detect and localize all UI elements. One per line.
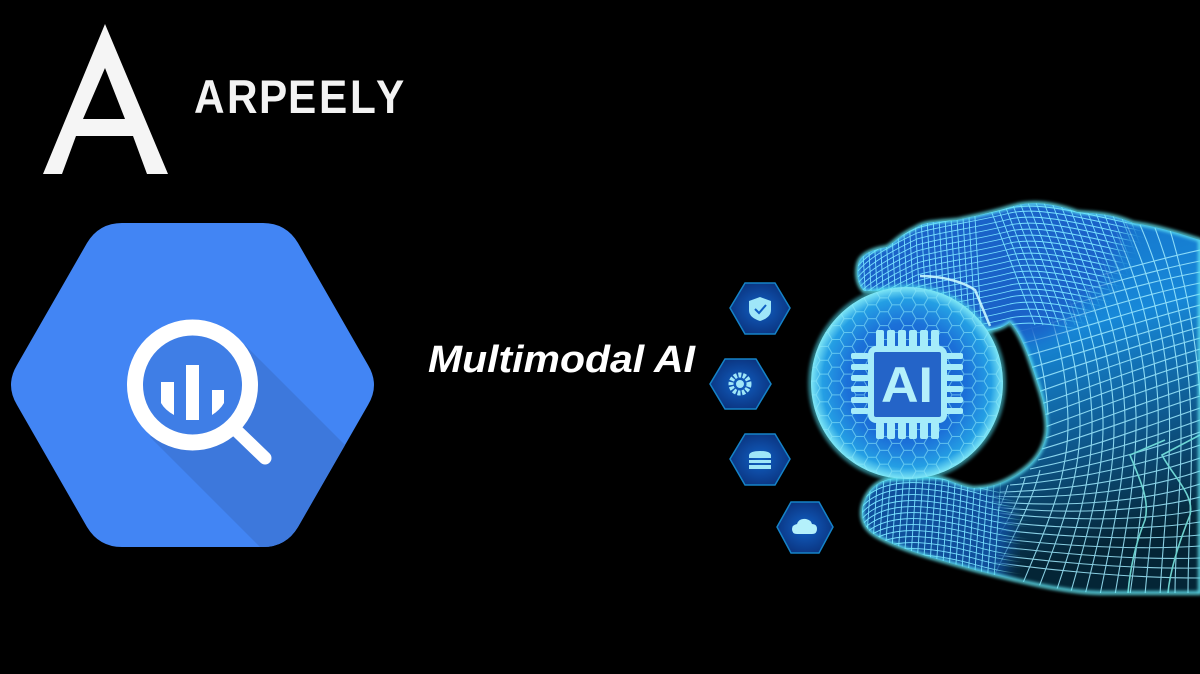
hand glow edge <box>857 203 1200 593</box>
long shadow <box>150 345 345 547</box>
cloud <box>792 519 817 534</box>
gear <box>731 375 749 393</box>
sphere glow <box>808 284 1006 482</box>
magnifier lens <box>142 335 242 435</box>
magnifier ring <box>135 328 250 442</box>
finger and knuckle mesh <box>857 203 1142 354</box>
icon: AI chip sphere <box>808 284 1006 482</box>
icon: cloud badge <box>777 502 833 553</box>
bar chart glyph <box>161 365 224 420</box>
badge hexagon <box>730 283 790 334</box>
hand silhouette <box>857 203 1200 593</box>
check mark <box>755 305 766 313</box>
hexagon net <box>811 287 1003 479</box>
finger fold highlight <box>920 276 990 326</box>
chip label: AI <box>881 357 933 413</box>
icon: wireframe hand <box>852 198 1200 598</box>
title: Multimodal AI <box>428 339 697 381</box>
server stack <box>749 451 771 469</box>
wordmark: ARPEELY <box>194 72 404 124</box>
gear hub <box>736 380 744 388</box>
icon: shield badge <box>730 283 790 334</box>
icon: gear badge <box>710 359 771 409</box>
badge hexagon <box>777 502 833 553</box>
sphere body <box>811 287 1003 479</box>
badge hexagon <box>730 434 790 485</box>
hand mesh <box>958 212 1200 593</box>
shield <box>749 297 771 321</box>
chip body <box>871 349 944 420</box>
magnifier handle <box>237 431 265 458</box>
icon: Arpeely letter A <box>43 24 168 174</box>
icon: server badge <box>730 434 790 485</box>
hexagon body <box>11 223 374 547</box>
icon: BigQuery hexagon <box>11 223 374 547</box>
badge hexagon <box>710 359 771 409</box>
Arpeely logo <box>43 24 404 174</box>
thumb mesh <box>862 477 1027 578</box>
chip pins <box>851 330 963 439</box>
